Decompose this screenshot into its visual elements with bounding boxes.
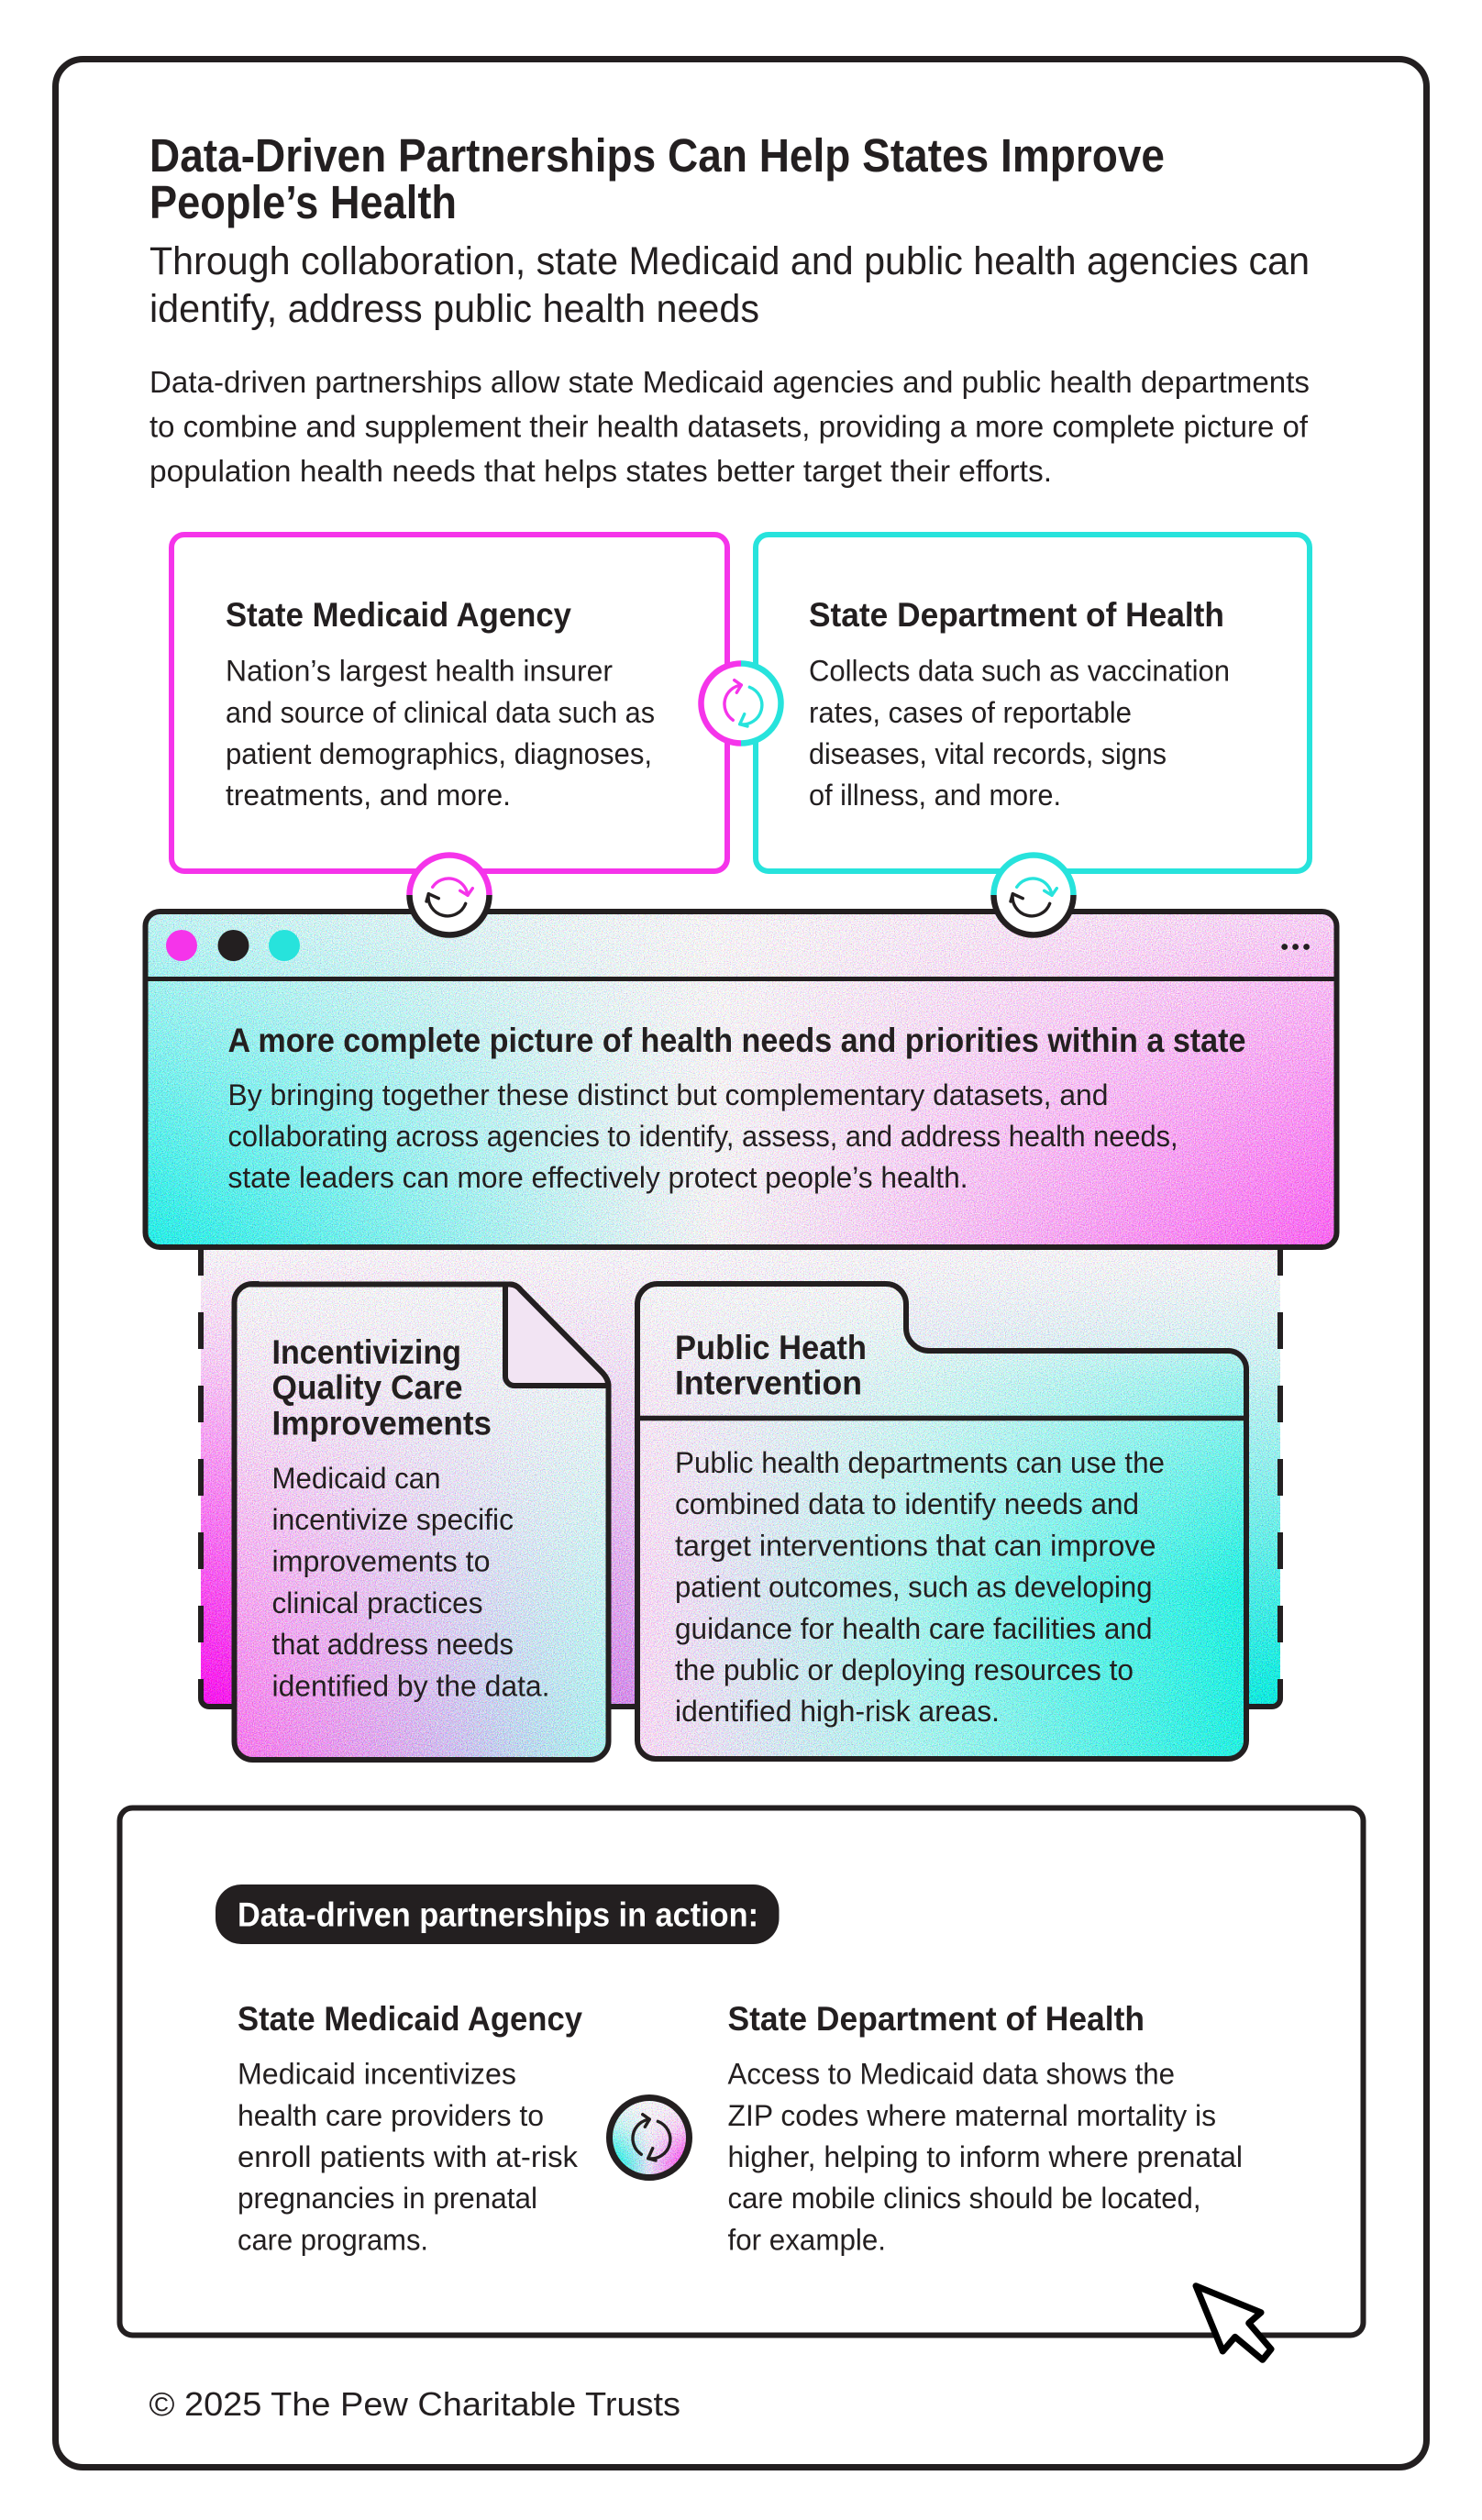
- text: public health description: [675, 1446, 1165, 1728]
- panel: state department of health: [756, 535, 1310, 871]
- subtitle: identify, address public health needs: [149, 287, 759, 331]
- text: public health description: combined data to identify needs and: [675, 1487, 1139, 1520]
- heading: public heath intervention: Intervention: [675, 1365, 862, 1401]
- text: complete picture description: collaborating across agencies to identify, assess, and address health needs,: [227, 1120, 1178, 1153]
- heading: incentivizing quality care improvements: Improvements: [271, 1405, 492, 1442]
- heading: state medicaid agency: State Medicaid Agency: [226, 596, 571, 634]
- text: health department example: Access to Medicaid data shows the: [728, 2058, 1175, 2091]
- heading: public heath intervention: [675, 1329, 867, 1401]
- text: medicaid example: Medicaid incentivizes: [238, 2058, 516, 2091]
- text: incentivizing description: [271, 1462, 550, 1702]
- title: Data-Driven Partnerships Can Help States Improve: [149, 129, 1165, 182]
- text: incentivizing description: incentivize specific: [271, 1503, 514, 1536]
- heading: public heath intervention: Public Heath: [675, 1329, 867, 1366]
- window control dots: [166, 930, 300, 961]
- text: complete picture description: state leaders can more effectively protect people’s health.: [227, 1161, 968, 1194]
- heading: incentivizing quality care improvements: Incentivizing: [271, 1333, 461, 1371]
- text: incentivizing description: clinical practices: [271, 1586, 482, 1619]
- label pill: Data-driven partnerships in action:: [238, 1896, 758, 1933]
- text: complete picture description: [227, 1078, 1178, 1194]
- heading: incentivizing quality care improvements: [271, 1333, 492, 1442]
- text: health department example: ZIP codes where maternal mortality is: [728, 2099, 1216, 2132]
- heading: state department of health: State Department of Health: [809, 596, 1224, 634]
- panel: folder card public health intervention: [637, 1284, 1246, 1759]
- panel: document card incentivizing quality care: [235, 1284, 609, 1760]
- intro text: [149, 365, 1310, 488]
- text: medicaid description: and source of clinical data such as: [226, 696, 655, 729]
- text: health department example: [728, 2058, 1243, 2256]
- panel: state medicaid agency: [171, 535, 727, 871]
- text: health department example: higher, helping to inform where prenatal: [728, 2140, 1243, 2173]
- text: health department description: Collects data such as vaccination: [809, 655, 1230, 688]
- icon: exchange circle health department to window: [994, 855, 1073, 935]
- text: public health description: target interventions that can improve: [675, 1530, 1156, 1563]
- text: public health description: patient outcomes, such as developing: [675, 1570, 1152, 1603]
- panel: data-driven partnerships in action: [119, 1808, 1363, 2335]
- icon: exchange circle medicaid to window: [409, 855, 490, 935]
- text: incentivizing description: that address needs: [271, 1628, 514, 1661]
- text: medicaid example: pregnancies in prenatal: [238, 2182, 537, 2215]
- text: medicaid example: enroll patients with at-risk: [238, 2140, 579, 2173]
- text: incentivizing description: identified by the data.: [271, 1669, 550, 1702]
- text: public health description: Public health departments can use the: [675, 1446, 1165, 1479]
- title: [149, 129, 1165, 228]
- text: public health description: the public or deploying resources to: [675, 1653, 1134, 1686]
- text: health department example: for example.: [728, 2223, 886, 2256]
- text: incentivizing description: Medicaid can: [271, 1462, 440, 1495]
- heading: incentivizing quality care improvements: Quality Care: [271, 1368, 462, 1407]
- dashed back panel: [201, 1247, 1280, 1708]
- icon: mouse cursor: [1196, 2286, 1271, 2360]
- text: complete picture description: By bringing together these distinct but complementary datasets, and: [227, 1078, 1108, 1111]
- title: People’s Health: [149, 176, 457, 228]
- intro text: population health needs that helps states better target their efforts.: [149, 454, 1052, 488]
- text: health department description: rates, cases of reportable: [809, 696, 1132, 729]
- text: medicaid description: [226, 655, 655, 812]
- icon: gradient exchange circle: [609, 2098, 690, 2177]
- text: public health description: identified high-risk areas.: [675, 1695, 1000, 1728]
- window menu dots: [1281, 944, 1310, 950]
- intro text: to combine and supplement their health datasets, providing a more complete picture of: [149, 409, 1309, 444]
- footer copyright: © 2025 The Pew Charitable Trusts: [149, 2385, 680, 2423]
- text: medicaid description: treatments, and more.: [226, 779, 511, 812]
- page fold: [505, 1284, 609, 1386]
- text: health department example: care mobile clinics should be located,: [728, 2182, 1201, 2215]
- text: medicaid example: health care providers to: [238, 2099, 544, 2132]
- text: medicaid example: [238, 2058, 579, 2256]
- intro text: Data-driven partnerships allow state Medicaid agencies and public health departments: [149, 365, 1310, 399]
- text: incentivizing description: improvements to: [271, 1544, 490, 1577]
- heading: state medicaid agency example: State Medicaid Agency: [238, 2000, 582, 2038]
- icon: exchange circle between agencies: [701, 664, 781, 743]
- heading: complete picture: A more complete picture of health needs and priorities within a state: [227, 1022, 1245, 1059]
- text: health department description: diseases, vital records, signs: [809, 737, 1167, 770]
- label pill: [216, 1884, 780, 1944]
- subtitle: Through collaboration, state Medicaid and public health agencies can: [149, 239, 1310, 283]
- subtitle: [149, 239, 1310, 331]
- heading: state department of health example: State Department of Health: [728, 2000, 1145, 2038]
- panel: browser window summary: [145, 912, 1337, 1247]
- text: health department description: [809, 655, 1230, 812]
- text: medicaid example: care programs.: [238, 2223, 428, 2256]
- text: medicaid description: patient demographics, diagnoses,: [226, 737, 652, 770]
- text: health department description: of illness, and more.: [809, 779, 1061, 812]
- text: medicaid description: Nation’s largest health insurer: [226, 655, 613, 688]
- text: public health description: guidance for health care facilities and: [675, 1612, 1152, 1645]
